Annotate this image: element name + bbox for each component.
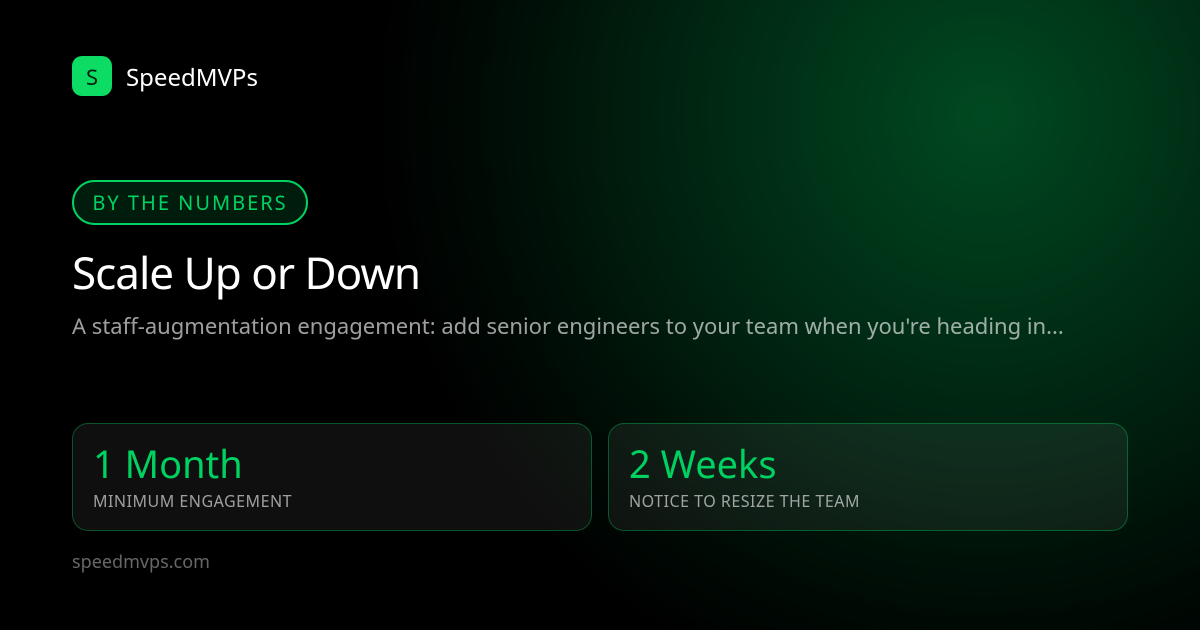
brand name: SpeedMVPs [126,61,258,94]
title: Scale Up or Down [72,242,420,302]
logo mark [72,56,112,96]
footer url: speedmvps.com [72,550,210,574]
logo mark: S [86,62,98,92]
subtitle: A staff-augmentation engagement: add senior engineers to your team when you're heading in... [72,311,1064,341]
stat label: NOTICE TO RESIZE THE TEAM [629,490,860,512]
stat value: 2 Weeks [629,438,777,490]
stat card: notice to resize [608,423,1128,531]
badge: by the numbers: BY THE NUMBERS [92,189,288,216]
badge: by the numbers [72,180,308,225]
stat label: MINIMUM ENGAGEMENT [93,490,292,512]
stat card: minimum engagement [72,423,592,531]
stat value: 1 Month [93,438,243,490]
